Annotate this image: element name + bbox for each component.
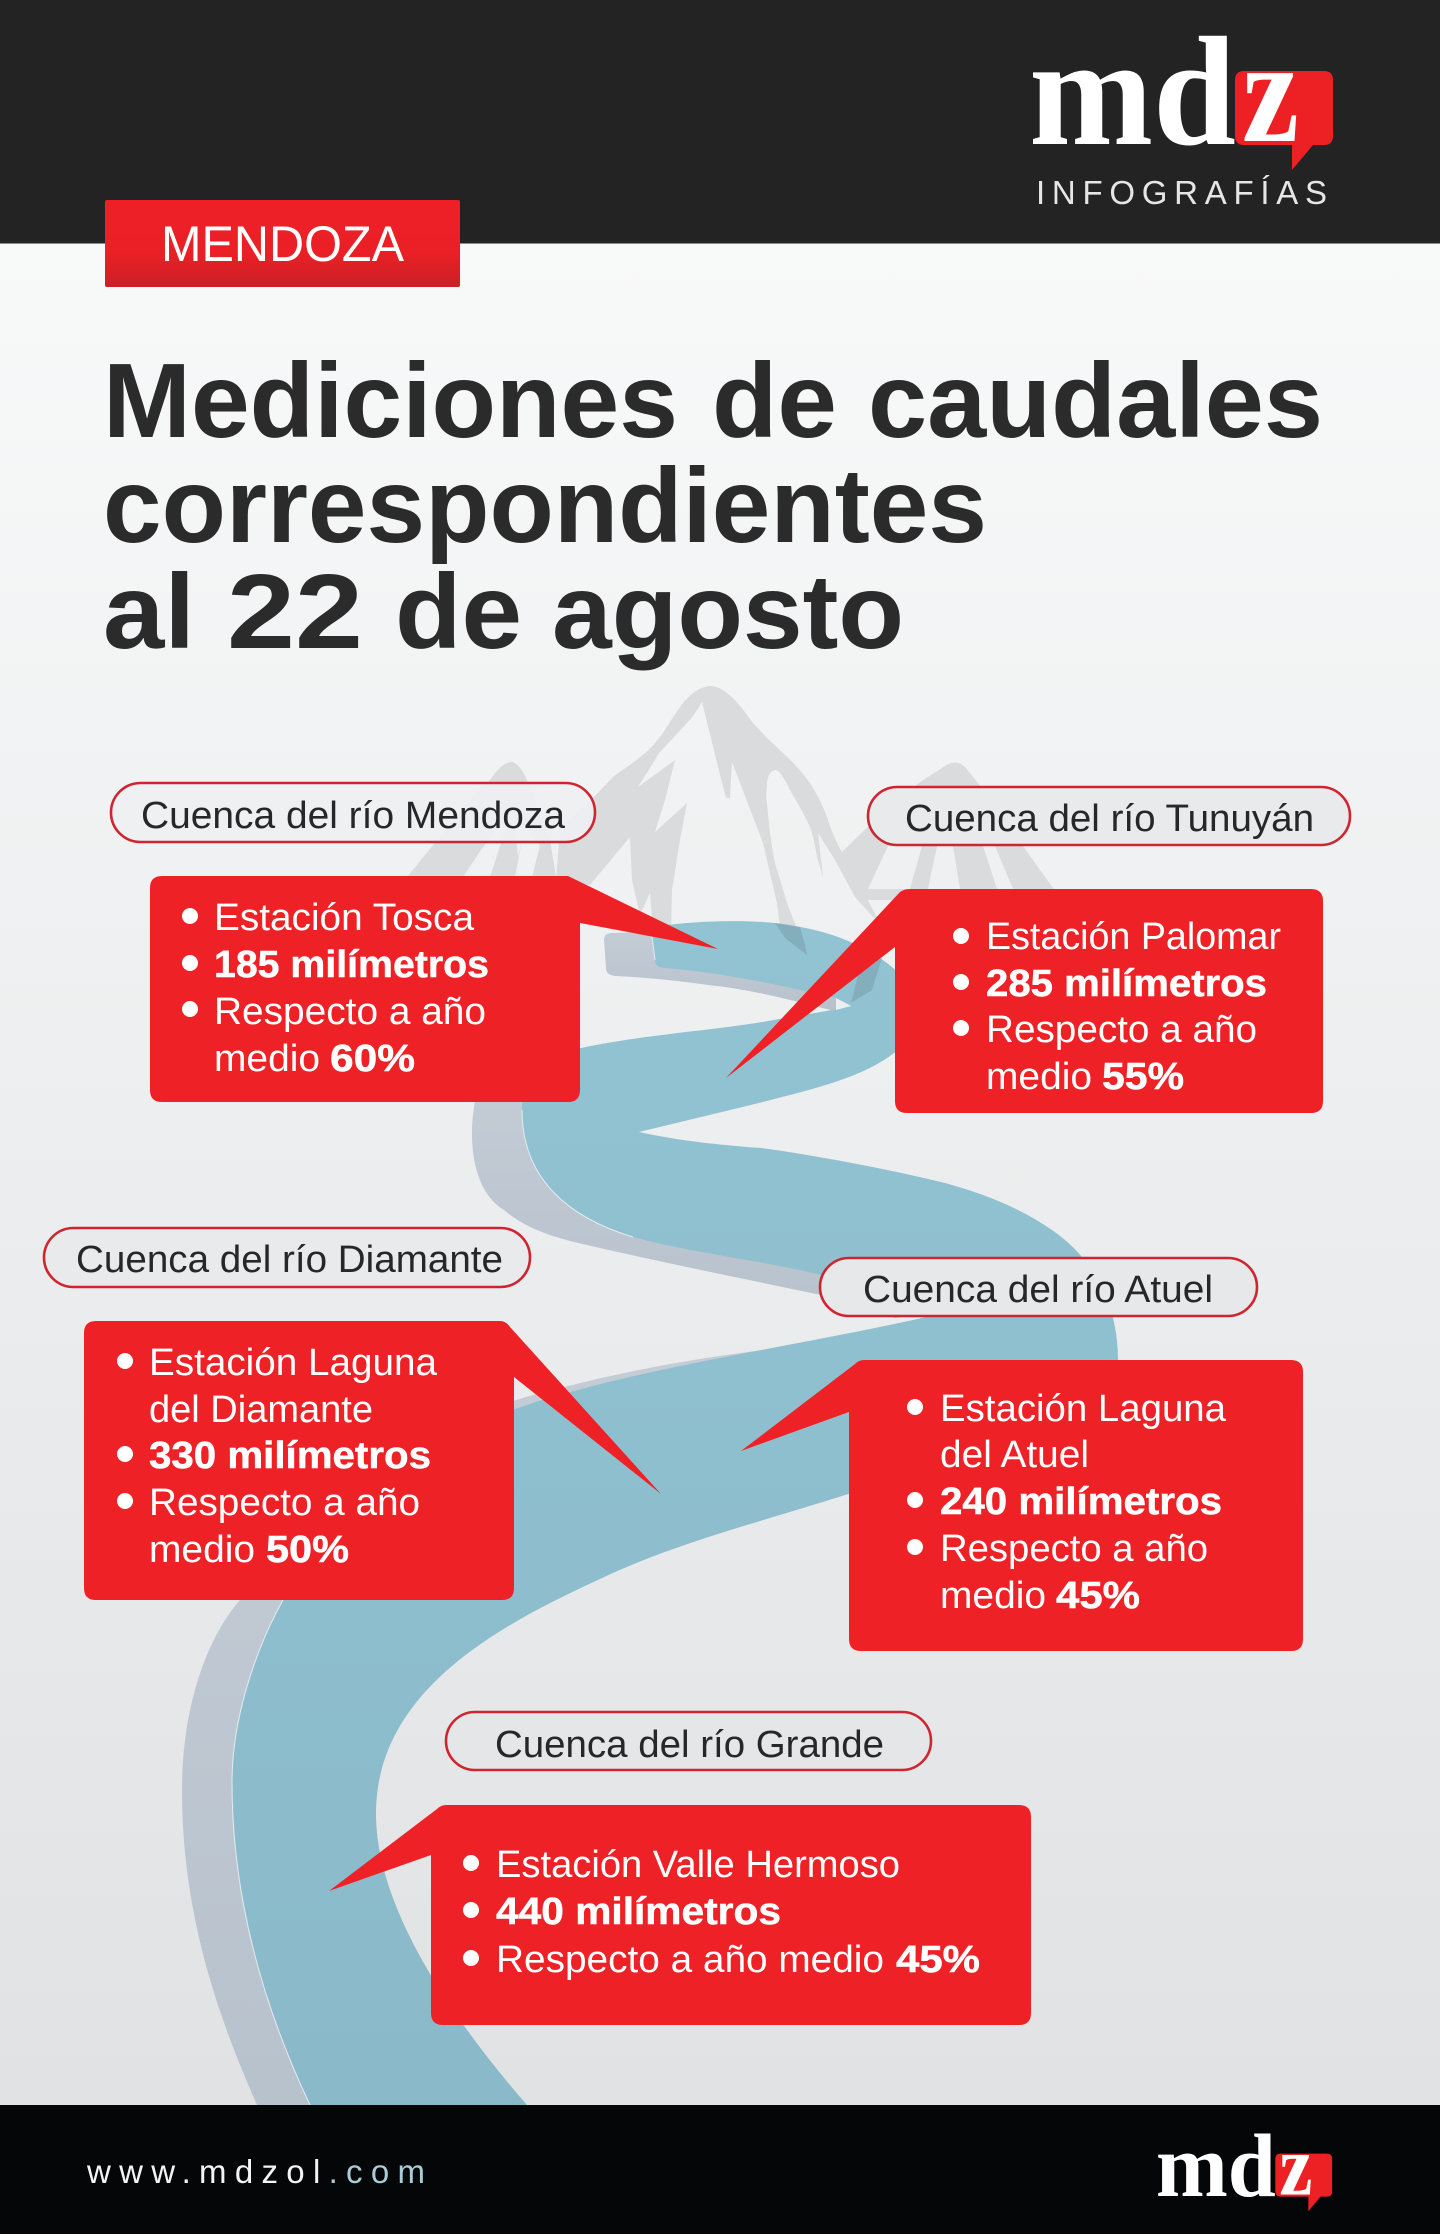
panel: río Tunuyán: Cuenca del río Tunuyán bbox=[905, 798, 1314, 840]
bullet list: Respecto a año bbox=[940, 1528, 1208, 1570]
logo: mdz infografías bbox=[1029, 5, 1333, 211]
main peak snow bbox=[556, 686, 1053, 955]
bullet list bbox=[117, 1342, 438, 1571]
pill label bbox=[820, 1258, 1257, 1316]
illustration: river bbox=[232, 921, 1118, 2105]
bullet list: 60% bbox=[330, 1038, 415, 1080]
left peak snow bbox=[407, 762, 556, 877]
logo letter z: z bbox=[1242, 10, 1299, 174]
bullet list bbox=[953, 916, 1281, 1098]
bullet list: medio bbox=[940, 1575, 1046, 1617]
right peak interior cut: right bbox=[983, 846, 1013, 889]
callout box bbox=[150, 876, 718, 1102]
bullet list: Respecto a año bbox=[214, 991, 486, 1033]
footer logo letters md: md bbox=[1156, 2115, 1276, 2216]
bullet list: medio bbox=[149, 1529, 255, 1571]
title: 22 bbox=[227, 553, 363, 671]
header band bbox=[0, 0, 1440, 244]
callout box bbox=[741, 1360, 1303, 1651]
bullet list: 45% bbox=[896, 1939, 980, 1981]
panel: río Mendoza: Cuenca del río Mendoza bbox=[141, 795, 566, 837]
bullet list: Estación Tosca bbox=[214, 897, 475, 939]
website url: www.mdzol.com bbox=[86, 2153, 433, 2190]
bullet list: medio bbox=[986, 1056, 1092, 1098]
tag: Mendoza bbox=[105, 200, 460, 287]
bullet list: Estación Valle Hermoso bbox=[496, 1844, 900, 1886]
bullet list: 55% bbox=[1102, 1056, 1184, 1098]
panel: río Grande: Cuenca del río Grande bbox=[495, 1724, 884, 1766]
bullet list: 240 milímetros bbox=[940, 1481, 1222, 1523]
bullet list: 185 milímetros bbox=[214, 944, 489, 986]
tag label: MENDOZA bbox=[161, 216, 405, 272]
right peak interior cut: left bbox=[868, 846, 922, 889]
panel: río Atuel bbox=[741, 1258, 1303, 1651]
bullet list: Estación Laguna bbox=[149, 1342, 438, 1384]
bullet list: medio bbox=[214, 1038, 320, 1080]
river highlights and mountain reflections bbox=[232, 923, 882, 2105]
panel: río Grande bbox=[329, 1712, 1031, 2025]
panel: río Mendoza bbox=[111, 783, 718, 1102]
title: al bbox=[103, 553, 195, 671]
bullet list: 45% bbox=[1056, 1575, 1140, 1617]
footer band bbox=[0, 2105, 1440, 2234]
bullet list bbox=[182, 897, 489, 1080]
pill label bbox=[44, 1228, 530, 1287]
right peak interior cut: centre bbox=[928, 846, 960, 889]
callout box bbox=[726, 889, 1323, 1113]
bullet list: 285 milímetros bbox=[986, 963, 1267, 1005]
bullet list bbox=[463, 1844, 980, 1981]
title: correspondientes bbox=[103, 447, 987, 565]
tag background bbox=[105, 200, 460, 287]
bullet list bbox=[907, 1388, 1227, 1617]
bullet list: Respecto a año bbox=[986, 1009, 1257, 1051]
callout box bbox=[329, 1805, 1031, 2025]
logo letters md: md bbox=[1029, 5, 1236, 178]
panel: río Diamante bbox=[44, 1228, 661, 1600]
pill label bbox=[868, 787, 1350, 845]
panel: río Tunuyán bbox=[726, 787, 1350, 1113]
bullet list: 330 milímetros bbox=[149, 1435, 431, 1477]
title: agosto bbox=[552, 553, 904, 671]
bullet list: 50% bbox=[266, 1529, 349, 1571]
title: Mediciones bbox=[103, 342, 678, 460]
bullet list: Respecto a año medio bbox=[496, 1939, 884, 1981]
footer logo bbox=[1156, 2115, 1332, 2216]
panel: río Diamante: Cuenca del río Diamante bbox=[76, 1239, 503, 1281]
title bbox=[103, 342, 1323, 671]
illustration: mountains bbox=[407, 686, 1053, 955]
bullet list: Estación Laguna bbox=[940, 1388, 1227, 1430]
bullet list: del Atuel bbox=[940, 1434, 1089, 1476]
title: caudales bbox=[868, 342, 1323, 460]
callout box bbox=[84, 1321, 661, 1600]
bullet list: 440 milímetros bbox=[496, 1891, 781, 1933]
title: de bbox=[712, 342, 837, 460]
bullet list: del Diamante bbox=[149, 1389, 373, 1431]
bullet list: Estación Palomar bbox=[986, 916, 1281, 958]
footer logo bubble bbox=[1275, 2154, 1332, 2211]
pill label bbox=[446, 1712, 931, 1770]
illustration: river bank shadow bbox=[182, 930, 960, 2105]
bullet list: Respecto a año bbox=[149, 1482, 420, 1524]
footer logo letter z: z bbox=[1279, 2118, 1312, 2213]
title: de bbox=[395, 553, 522, 671]
panel: río Atuel: Cuenca del río Atuel bbox=[863, 1269, 1213, 1311]
logo speech bubble bbox=[1235, 71, 1333, 170]
infografías caption: INFOGRAFÍAS bbox=[1036, 174, 1327, 211]
pill label bbox=[111, 783, 595, 842]
